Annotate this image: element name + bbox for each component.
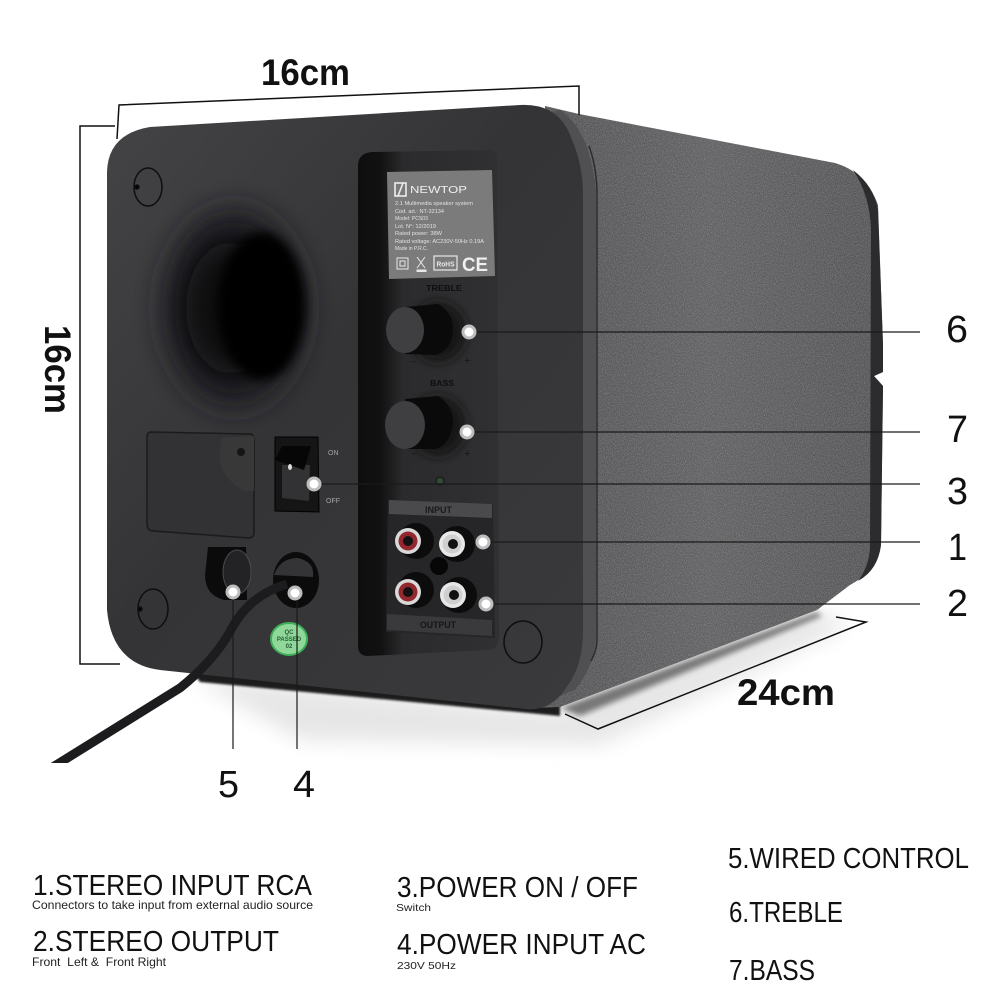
LED: [436, 477, 444, 485]
speaker front face: [107, 105, 583, 709]
legend: items 5 to 7: 7.BASS: [729, 955, 815, 987]
QC sticker: [271, 623, 307, 655]
label text: Rated voltage: AC230V-50Hz 0.19A: [395, 239, 484, 245]
legend: items 1 and 2: 2.STEREO OUTPUT: [33, 926, 279, 958]
logo: NEWTOP: [410, 185, 467, 196]
dimension: height: 16cm: [37, 325, 78, 414]
label text: Rated power: 38W: [395, 231, 443, 237]
corner screw covers: [134, 168, 542, 663]
bass port: [162, 208, 306, 408]
marker dots: [227, 326, 492, 610]
rca panel: OUTPUT: [420, 620, 456, 630]
certification marks: [397, 255, 488, 276]
rca panel: INPUT: [425, 505, 453, 515]
legend: items 1 and 2: Front Left & Front Right: [32, 955, 167, 969]
legend: items 3 and 4: Switch: [396, 903, 431, 914]
callout numbers: 5: [218, 764, 239, 806]
callout numbers: 4: [293, 764, 315, 806]
rear dark edge: [853, 170, 883, 581]
certification marks: RoHS: [436, 260, 454, 268]
treble knob: –: [411, 356, 416, 366]
speaker photo: [40, 105, 883, 775]
treble knob: [386, 302, 470, 367]
power switch: ON: [328, 450, 338, 457]
dimension: depth: 24cm: [737, 672, 835, 713]
legend: items 5 to 7: [728, 843, 969, 987]
dimension: depth: [565, 617, 866, 729]
QC sticker: QC: [284, 630, 294, 636]
power cable: [40, 584, 287, 775]
callout numbers: [218, 309, 968, 806]
legend: items 5 to 7: 5.WIRED CONTROL: [728, 843, 969, 875]
label text: 2.1 Multimedia speaker system: [395, 201, 474, 207]
bass label: BASS: [430, 379, 455, 388]
dimension: height: [37, 126, 120, 664]
dimension: width: 16cm: [261, 52, 350, 93]
legend: items 3 and 4: 4.POWER INPUT AC: [397, 929, 646, 961]
QC sticker: PASSED: [277, 637, 302, 643]
front bezel band: [520, 110, 596, 706]
callout numbers: 3: [947, 471, 968, 513]
label text: Cod. art.: NT-32134: [395, 209, 444, 215]
floor shadow: [190, 612, 850, 745]
legend: items 3 and 4: 3.POWER ON / OFF: [397, 872, 638, 904]
legend: items 1 and 2: 1.STEREO INPUT RCA: [33, 870, 313, 902]
bass knob: +: [464, 448, 470, 460]
callout numbers: 6: [946, 309, 968, 351]
legend: items 3 and 4: [396, 872, 646, 972]
product label: [387, 170, 495, 279]
callout numbers: 7: [947, 409, 968, 451]
control recess: [358, 150, 499, 656]
legend: items 5 to 7: 6.TREBLE: [729, 897, 843, 929]
treble label: TREBLE: [426, 284, 463, 293]
legend: items 1 and 2: [32, 870, 313, 969]
wired control socket: [205, 547, 251, 600]
certification marks: CE: [462, 255, 488, 276]
callout numbers: 2: [947, 583, 968, 625]
speaker side panel: [520, 106, 883, 708]
power switch: OFF: [326, 498, 340, 505]
treble knob: +: [464, 355, 470, 367]
label text: Lot. N°: 12/2019: [395, 224, 436, 230]
power switch: [275, 437, 340, 512]
hatch cover: [147, 432, 254, 538]
rca panel: [386, 500, 495, 638]
rca sockets: [395, 523, 477, 613]
label text: Made in P.R.C.: [395, 246, 428, 252]
QC sticker: 02: [286, 644, 293, 650]
power socket: [273, 552, 319, 608]
label text: [395, 201, 484, 252]
bass knob: [385, 396, 470, 460]
callout numbers: 1: [948, 527, 967, 569]
label text: Model: PCS03: [395, 216, 428, 222]
legend: items 3 and 4: 230V 50Hz: [397, 961, 456, 972]
leader lines: [233, 332, 920, 749]
legend: items 1 and 2: Connectors to take input from external audio source: [32, 898, 313, 912]
bass knob: –: [412, 448, 417, 458]
dimension: width: [117, 52, 579, 139]
